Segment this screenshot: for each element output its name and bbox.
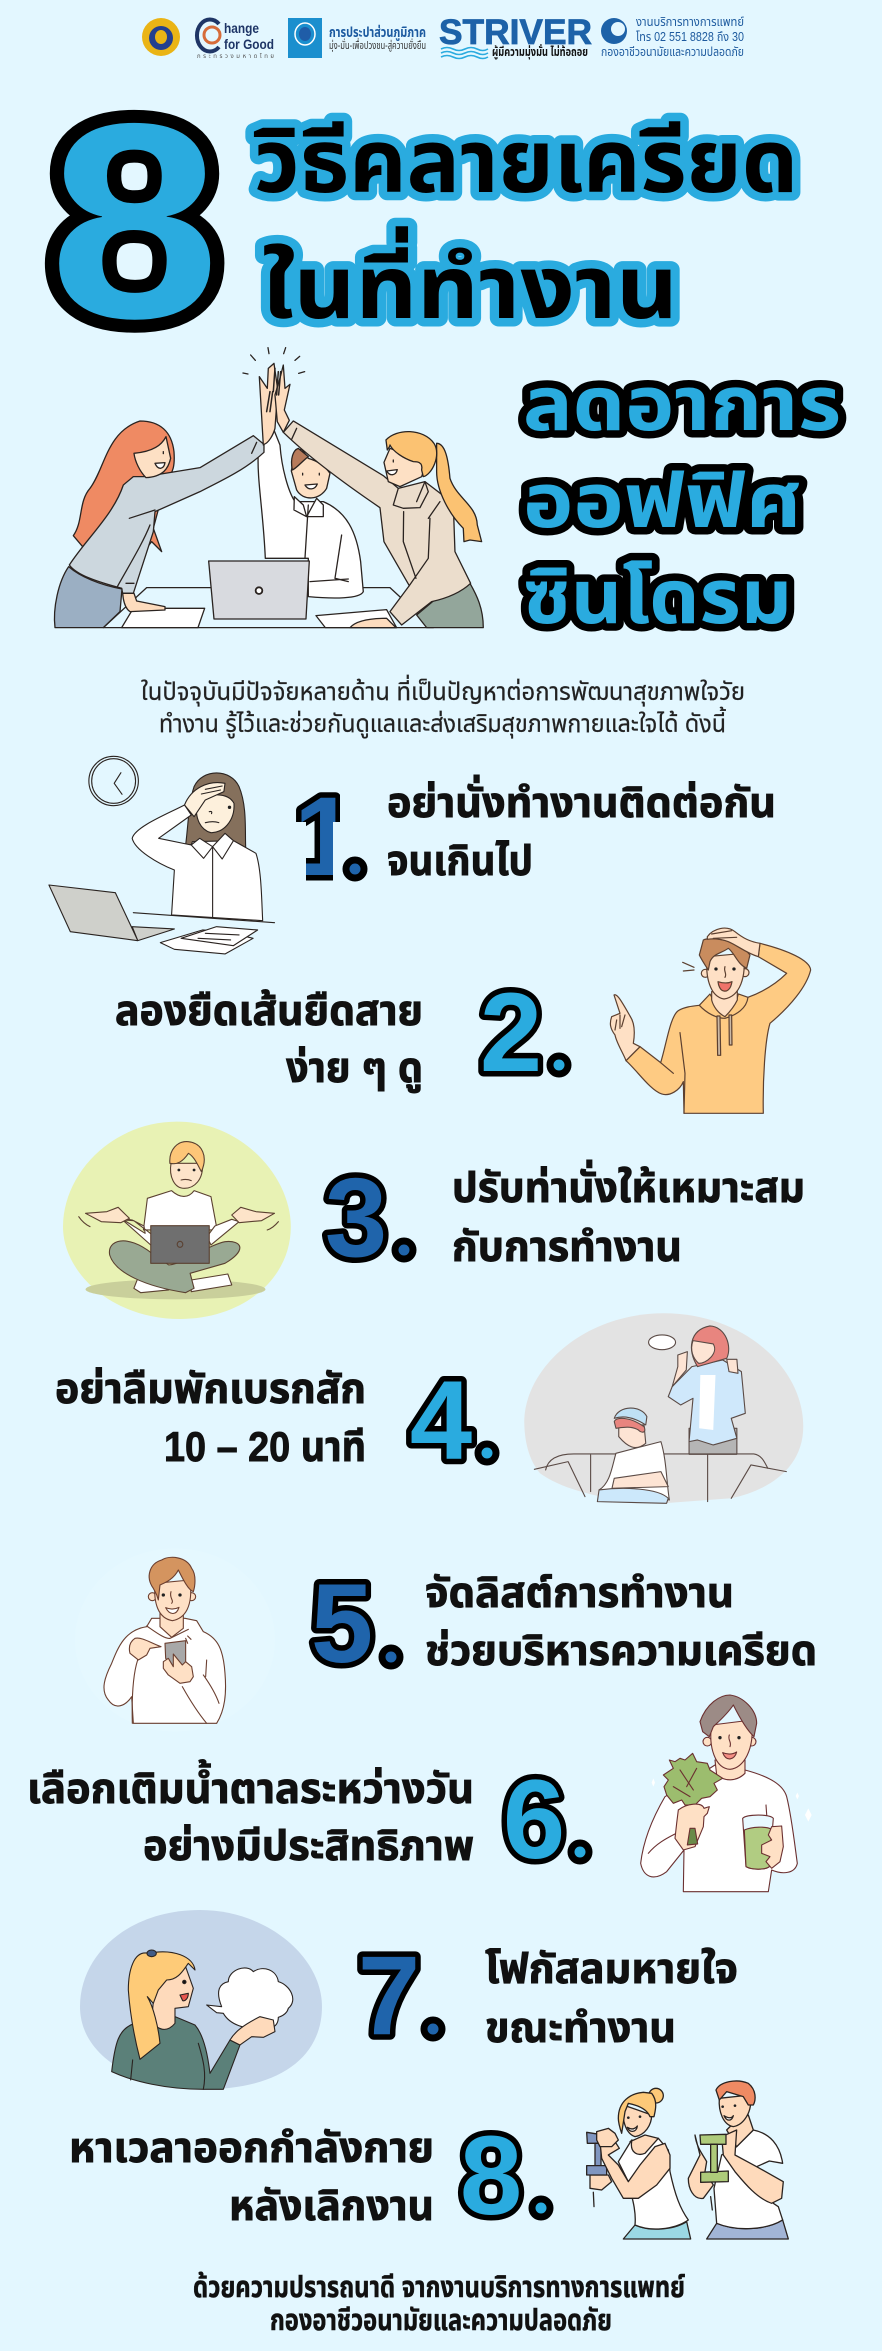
number 1: 1: [294, 774, 356, 899]
ears and face: [701, 969, 709, 977]
motion marks: [79, 1217, 278, 1230]
title line 2: ในที่ทำงาน: [262, 226, 678, 337]
logo: provincial waterworks: การประปาส่วนภูมิภาค: [329, 24, 426, 42]
legs: [109, 1241, 240, 1293]
ponytail and hair: [128, 1952, 195, 2059]
number 3: 3: [325, 1155, 387, 1280]
arms: [121, 1218, 239, 1245]
woman dumbbell: [587, 2132, 599, 2143]
logo: change for good: for Good: [224, 36, 274, 52]
item 8 text: [69, 2124, 434, 2229]
footer text: กองอาชีวอนามัยและความปลอดภัย: [270, 2305, 612, 2337]
feet: [134, 1274, 232, 1293]
title line 1: วิธีคลายเครียด: [253, 112, 798, 211]
logo: striver: STRIVER: [439, 13, 592, 52]
right woman raised arm: [275, 365, 290, 432]
footer text: ด้วยความปรารถนาดี จากงานบริการทางการแพทย์: [193, 2272, 685, 2304]
faint background blob: [75, 1548, 275, 1732]
number 5: [311, 1561, 400, 1686]
left woman skirt: [54, 567, 122, 628]
laptop: [209, 561, 309, 619]
sitting person body: [599, 1442, 669, 1500]
number 1: [296, 792, 368, 882]
hand: [230, 2017, 275, 2045]
facial features: [205, 811, 219, 823]
man dumbbell: [700, 2134, 728, 2182]
hand on forehead: [184, 783, 225, 817]
item 3 text: [452, 1159, 805, 1270]
item 1 text: [387, 774, 776, 884]
item 4 text: อย่าลืมพักเบรกสัก: [55, 1365, 366, 1412]
pointing hand: [610, 995, 640, 1061]
phone: [165, 1641, 186, 1672]
holding hand: [163, 1654, 193, 1683]
logo: provincial waterworks: [288, 18, 426, 58]
right woman ponytail: [437, 443, 482, 542]
hair: [186, 773, 246, 850]
clock: [89, 756, 138, 806]
logo: change for good: hange: [224, 20, 259, 36]
item 6 text: [27, 1759, 474, 1869]
woman shorts: [623, 2222, 691, 2239]
neck: [715, 1760, 745, 1780]
ground shadow: [86, 1279, 266, 1299]
title: big number 8: 8: [49, 65, 220, 376]
left woman face: [134, 437, 171, 478]
woman chest: [630, 2135, 658, 2154]
neck: [712, 992, 737, 1017]
subheading line 2: ออฟฟิศ: [523, 459, 802, 544]
illustration: three colleagues high-five: [54, 348, 483, 628]
subheading line 3: ซินโดรม: [523, 555, 792, 640]
subheading line 1: ลดอาการ: [523, 362, 841, 447]
intro text: ทำงาน รู้ไว้และช่วยกันดูแลและส่งเสริมสุขภาพกายและใจได้ ดังนี้: [159, 706, 726, 739]
left woman raised arm: [259, 363, 277, 445]
right woman blouse: [283, 421, 471, 625]
laptop: [151, 1226, 209, 1263]
glass of juice: [743, 1815, 773, 1869]
intro text: ในปัจจุบันมีปัจจัยหลายด้าน ที่เป็นปัญหาต่อการพัฒนาสุขภาพใจวัย: [141, 674, 745, 707]
number 7: 7: [358, 1933, 420, 2058]
number 5: 5: [311, 1561, 373, 1686]
table and papers: [103, 588, 433, 628]
hoodie: [626, 943, 811, 1113]
logo: occupational health division: [601, 15, 744, 59]
standing woman trousers: [689, 1428, 737, 1454]
logo: striver: ผู้มีความมุ่งมั่น ไม่ท้อถอย: [492, 43, 588, 60]
illustration 2: man in hoodie pointing: [610, 928, 811, 1113]
sparkles: [652, 1778, 812, 1822]
eyes, nose, mouth: [714, 967, 718, 971]
motion mark: [593, 2192, 712, 2210]
man trousers: [707, 2220, 788, 2239]
illustration 6: man with greens and juice: [641, 1695, 812, 1892]
logo: occupational health division: งานบริการทางการแพทย์: [636, 15, 744, 29]
seated man: [258, 428, 363, 598]
item 8 text: หาเวลาออกกำลังกาย: [69, 2124, 434, 2171]
man head: [719, 2095, 751, 2127]
eyes, nose, mouth: [718, 1736, 722, 1739]
illustration 5: man using phone: [75, 1548, 275, 1732]
hands: [86, 1207, 274, 1223]
number 2: 2: [480, 970, 542, 1095]
hair tie: [147, 1950, 156, 1957]
number 8: 8: [460, 2113, 522, 2238]
hair: [699, 939, 750, 970]
illustration 8: couple lifting dumbbells: [587, 2081, 788, 2239]
item 2 text: [115, 987, 423, 1093]
face: [196, 795, 234, 833]
illustration 3: man cross-legged with laptop: [63, 1122, 291, 1319]
item 4 text: [55, 1365, 366, 1470]
surprise marks: [683, 962, 694, 971]
head: [171, 1163, 203, 1188]
sofa: [534, 1454, 786, 1502]
holding hand: [762, 1826, 783, 1868]
item 2 text: ลองยืดเส้นยืดสาย: [115, 987, 423, 1034]
sweater: [112, 2017, 240, 2089]
neck: [160, 1613, 183, 1637]
hair: [700, 1695, 757, 1737]
item 5 text: ช่วยบริหารความเครียด: [425, 1627, 817, 1674]
woman front arm: [600, 2142, 670, 2198]
item 1 text: อย่านั่งทำงานติดต่อกัน: [387, 774, 776, 826]
intro text: [141, 674, 745, 739]
item 7 text: [485, 1945, 738, 2051]
hair: [149, 1557, 195, 1600]
logo: provincial waterworks: มุ่ง-มั่น-เพื่อปวงชน-สู่ความยั่งยืน: [329, 37, 426, 52]
eyes, nose, mouth: [162, 1593, 165, 1597]
papers: [160, 930, 253, 954]
woman tank top: [618, 2138, 688, 2229]
woman fist: [597, 2128, 618, 2147]
hand on head: [707, 928, 760, 957]
standing woman shirt: [668, 1360, 745, 1445]
item 7 text: ขณะทำงาน: [485, 2004, 676, 2051]
item 5 text: [425, 1569, 817, 1674]
standing woman hands: [672, 1352, 738, 1387]
right woman face and hair: [384, 448, 427, 487]
blanket: [597, 1488, 668, 1503]
right woman trousers: [417, 583, 483, 628]
shirt: [132, 805, 263, 921]
blob background: [524, 1313, 803, 1503]
torso: [143, 1191, 217, 1230]
logo: occupational health division: โทร 02 551 8828 ถึง 30: [636, 30, 744, 44]
illustration 7: woman with thought cloud: [80, 1910, 322, 2089]
woman head: [623, 2105, 652, 2137]
logo: ministry seal: [142, 18, 180, 56]
item 6 text: อย่างมีประสิทธิภาพ: [143, 1822, 474, 1869]
left woman sweater: [69, 436, 264, 593]
man neck: [727, 2115, 753, 2147]
item 5 text: จัดลิสต์การทำงาน: [425, 1569, 734, 1616]
logo: change for good: [197, 19, 274, 60]
ears and face: [148, 1593, 156, 1601]
logo strip: [142, 13, 744, 60]
item 1 text: จนเกินไป: [387, 837, 533, 884]
hand with stems: [675, 1804, 709, 1850]
ears and face: [703, 1737, 712, 1746]
item 7 text: โฟกัสลมหายใจ: [485, 1945, 738, 1992]
desk edge: [133, 913, 274, 923]
speech bubble: [649, 1335, 676, 1350]
footer text: [193, 2272, 685, 2337]
standing woman face: [692, 1341, 715, 1363]
item 6 text: เลือกเติมน้ำตาลระหว่างวัน: [27, 1759, 474, 1812]
laptop: [49, 885, 174, 941]
blob background: [80, 1910, 322, 2089]
illustration 1: stressed woman at desk: [49, 756, 274, 954]
greens: [663, 1753, 723, 1805]
pointing hand: [129, 1638, 161, 1660]
item 8 text: หลังเลิกงาน: [229, 2182, 434, 2229]
number 6: 6: [503, 1757, 565, 1882]
drawstrings: [717, 1015, 732, 1055]
mouth: [180, 1993, 188, 2001]
number 8: [460, 2113, 550, 2238]
man shirt: [714, 2130, 783, 2229]
left woman hair: [73, 421, 174, 552]
sweater: [641, 1765, 797, 1892]
item 3 text: ปรับท่านั่งให้เหมาะสม: [452, 1159, 805, 1211]
item 2 text: ง่าย ๆ ดู: [286, 1044, 423, 1093]
logo: occupational health division: กองอาชีวอนามัยและความปลอดภัย: [601, 45, 744, 59]
left woman hand: [123, 593, 165, 612]
number 4: 4: [410, 1358, 472, 1483]
item 4 text: 10 – 20 นาที: [164, 1423, 366, 1470]
logo: change for good: กระทรวงมหาดไทย: [197, 54, 274, 60]
man arms: [722, 2130, 783, 2203]
right woman lower hand: [350, 618, 396, 628]
item 3 text: กับการทำงาน: [452, 1223, 682, 1270]
neck and face: [152, 1965, 193, 2029]
cloud: [207, 1968, 293, 2029]
hoodie: [104, 1618, 226, 1723]
standing woman hair: [691, 1326, 729, 1367]
sitting person head: [619, 1425, 646, 1448]
sparks: [243, 348, 305, 374]
blob background: [63, 1122, 291, 1319]
woman back arm: [590, 2175, 612, 2190]
subheading: reduce office syndrome: [523, 362, 841, 640]
illustration 4: woman talking to tired person on sofa: [524, 1313, 803, 1503]
